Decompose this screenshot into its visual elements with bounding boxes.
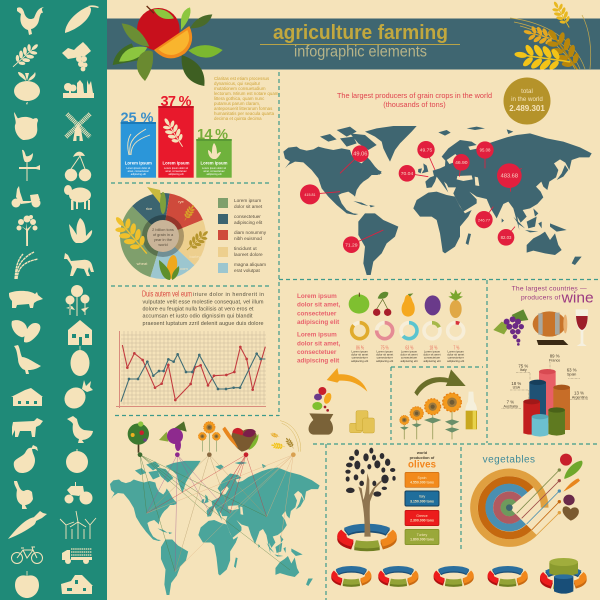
map pins: 246.77 [478, 217, 491, 222]
box: Italy: 3.150.000 tons [410, 499, 434, 503]
icon: truck [62, 549, 92, 564]
cylinder: Argentina [548, 407, 565, 436]
small captions: consectetuer [448, 356, 464, 360]
text: red lorem: dolor sit amet, [297, 302, 340, 309]
text block: gold paragraph: Claritas est etiam processus [214, 76, 270, 81]
map pins: 483.68 [501, 174, 518, 180]
text: pie centre: world [158, 242, 168, 247]
chart: donut 7 percent [448, 323, 464, 339]
cylinder labels: USA [513, 386, 521, 390]
chart: ring 4 [491, 569, 525, 584]
box: Greece: 2.300.000 tons [410, 519, 434, 523]
icon: grapes [493, 309, 528, 346]
box: Greece: Greece [416, 514, 428, 518]
icon: beet [563, 495, 575, 505]
icon: potato heart [563, 506, 579, 521]
icon: wheat on pie [108, 210, 156, 261]
map pins: 49.75 [420, 147, 432, 153]
cylinder labels [504, 354, 588, 409]
text block: gold paragraph: mutationem consuetudium [214, 86, 266, 91]
chart: donut 63 percent [401, 323, 417, 339]
text: red lorem: adipiscing elit [297, 358, 340, 365]
icon: farmhouse [61, 575, 93, 594]
text: red lorem: consectetuer [297, 310, 337, 317]
text block: duis autem: dolore eu feugiat nulla facilisis at vero eros et [142, 306, 254, 312]
legend item: diam nonummy [234, 230, 267, 235]
chart: donut 86 percent [352, 323, 368, 339]
icon: goose [14, 345, 41, 374]
icon: pig [9, 291, 43, 308]
icon: duck [67, 416, 93, 443]
icon: barrel [533, 311, 568, 345]
chart: ring 1 [334, 569, 368, 584]
icon: pineapple [60, 380, 93, 413]
map pins: 49.06 [353, 152, 367, 158]
icon: barn [11, 388, 43, 406]
series: red line [122, 345, 265, 401]
leader lines [517, 468, 561, 535]
heading: wine: The largest countries — [512, 285, 587, 292]
icon: vegetable heart [222, 427, 258, 452]
icon: carrot [563, 478, 580, 492]
cylinder labels: 7 % [507, 399, 514, 404]
box: Spain: 4.550.000 tons [410, 481, 434, 485]
legend item: erat volutpat [234, 268, 260, 273]
legend item: dolor sit amet [234, 204, 263, 209]
cylinder: France [539, 369, 556, 423]
text: red lorem [297, 293, 340, 365]
cylinder: Australia [532, 414, 548, 437]
bar: 25 percent [120, 110, 156, 178]
text: red lorem: adipiscing elit [297, 319, 340, 326]
callout: world total: total [521, 88, 533, 95]
small captions: Lorem ipsum [447, 350, 464, 354]
bar: 25 percent: 25 % [120, 110, 154, 126]
cylinder labels: 18 % [511, 381, 521, 386]
icon: pineapple [448, 289, 463, 318]
small captions: consectetuer [377, 356, 393, 360]
legend item: magna aliquam [234, 262, 266, 267]
map pins [300, 141, 522, 253]
bar: 25 percent: Lorem ipsum [125, 160, 152, 166]
icon: sheep [64, 185, 91, 210]
small captions: dolor sit amet [401, 353, 418, 357]
map pins: 46.90 [455, 160, 468, 166]
icon: top wheat ear [552, 2, 570, 28]
chart: olive ring [342, 527, 392, 548]
legend item: tincidunt ut [234, 246, 257, 251]
legend item: laoreet dolore [234, 252, 263, 257]
icon: carrot [8, 511, 47, 539]
chart: ring 2 [381, 569, 415, 584]
text block: gold paragraph: putamus parum claram, [214, 101, 260, 106]
text block: duis autem: accumsan et iusto odio dignissim qui blandit [142, 314, 253, 320]
icon: scooter [12, 186, 40, 208]
small captions: consectetuer [401, 356, 417, 360]
box: Turkey: 1.800.000 tons [410, 538, 434, 542]
pie labels [137, 199, 200, 271]
segment: rye [163, 194, 203, 236]
bar: 14 percent: Lorem ipsum [201, 160, 228, 166]
bar: 37 percent: Lorem ipsum [163, 160, 190, 166]
text block: duis autem: Duis autem vel eum [142, 290, 192, 298]
icon: wine glass [576, 309, 588, 346]
bar: 37 percent: adipiscing elit [168, 173, 184, 176]
icon: turkey [14, 112, 38, 140]
icon: header wheat [510, 2, 592, 70]
cylinder labels: France [549, 359, 560, 363]
icon: pear [402, 293, 415, 317]
percentage labels: 86 % [356, 345, 364, 351]
small captions: Lorem ipsum [401, 350, 418, 354]
text: pie centre: year in the [154, 237, 172, 242]
heading: vegetables: vegetables [483, 454, 535, 465]
text block: gold paragraph: littera gothica, quam nunc [214, 96, 265, 101]
map: grain producers [283, 126, 592, 275]
text: pie centre [147, 220, 179, 252]
heading: wine: wine [561, 291, 594, 307]
icon: oil bottle [465, 392, 477, 429]
box: Italy [405, 491, 439, 506]
text block: duis autem [142, 290, 264, 327]
icon: pear [14, 445, 38, 473]
box: Greece [405, 510, 439, 526]
small captions: dolor sit amet [376, 353, 393, 357]
text block: gold paragraph [214, 76, 279, 121]
map pins: 95.08 [480, 148, 491, 153]
icon: cow [12, 418, 43, 437]
title rule [260, 44, 460, 45]
text: pie centre: 2 billion tons [152, 227, 174, 232]
map pins: 70.04 [401, 171, 413, 177]
small captions: adipiscing elit [351, 359, 368, 363]
icon: apple and orange logo [113, 6, 223, 86]
text: pie centre: of grain in a [153, 232, 174, 237]
segment: wheat [120, 206, 163, 277]
small captions: consectetuer [352, 356, 368, 360]
segment: rice [132, 193, 170, 236]
text block: gold paragraph: dynamicus, qui sequitur [214, 81, 261, 86]
chart: stacked ring [543, 558, 583, 594]
pie labels: corn [180, 266, 188, 271]
icon: eggs [12, 320, 40, 342]
pie labels: barley [190, 254, 200, 259]
text block: gold paragraph: anteposuerit litterarum formas [214, 106, 273, 111]
small captions: dolor sit amet [424, 353, 441, 357]
box: Turkey [405, 529, 439, 545]
icon: farm scene [63, 80, 94, 98]
pie labels: wheat [137, 261, 148, 266]
heading: grain crops map [337, 91, 492, 109]
cylinder: Spain [553, 385, 570, 430]
line chart [116, 331, 266, 408]
icon: yellow wheat ear [514, 44, 570, 70]
chart: vegetables radial [474, 472, 545, 543]
icon: coins [350, 411, 374, 433]
cylinder labels: Argentina [572, 395, 588, 399]
icon: orange [66, 449, 88, 473]
bar: 25 percent: amet, consectetuer [128, 170, 149, 173]
icon: hen [14, 481, 33, 509]
percentage labels: 7 % [453, 345, 459, 351]
map pins: 71.29 [345, 242, 358, 248]
arrow: green [414, 369, 466, 396]
bar chart: percentages [120, 94, 232, 178]
icon: wheat ear [8, 39, 43, 73]
box: Spain: Spain [418, 476, 427, 480]
small captions: dolor sit amet [447, 353, 464, 357]
small captions: consectetuer [424, 356, 440, 360]
panel: olives and vegetables [334, 448, 583, 594]
icon: tractor [64, 482, 92, 504]
small captions: adipiscing elit [401, 359, 418, 363]
icon: bicycle [12, 547, 42, 564]
box: Turkey: Turkey [417, 533, 428, 537]
legend item [218, 262, 266, 273]
segment: corn [150, 236, 194, 279]
icon: sunflowers [400, 393, 461, 439]
legend: pie chart [218, 198, 267, 273]
percentage labels [356, 345, 459, 351]
small captions [351, 350, 464, 363]
icon: wheat stalks [15, 252, 38, 279]
icon: sack of produce [309, 387, 333, 435]
legend item [218, 246, 263, 257]
legend item [218, 230, 267, 241]
connector lines [140, 455, 293, 572]
text: red lorem: consectetuer [297, 349, 337, 356]
icon: barley ear [182, 226, 212, 255]
bar: 14 percent: 14 % [197, 127, 228, 143]
small captions: adipiscing elit [376, 359, 393, 363]
text block: duis autem: vulputate velit esse molestie consequat, vel illum [142, 300, 264, 306]
icon: tree [16, 215, 38, 246]
small captions: adipiscing elit [447, 359, 464, 363]
icon: turnip [14, 72, 40, 105]
text block: gold paragraph: humanitatis per seacula quarta [214, 111, 275, 116]
bar: 14 percent: adipiscing elit [206, 173, 222, 176]
icon: fruit tree [128, 421, 149, 453]
icon: cucumber [564, 461, 583, 479]
pie labels: rice [146, 206, 153, 211]
chart: donut 75 percent [377, 323, 393, 339]
map pins: 82.03 [501, 235, 512, 240]
panel: fruit statistics [297, 285, 594, 439]
icon: corn [69, 218, 92, 243]
cylinder labels: 13 % [574, 390, 584, 395]
panel: icon sidebar [0, 0, 107, 600]
heading: olives: world [416, 451, 428, 455]
bar: 37 percent: amet, consectetuer [165, 170, 187, 173]
icon: cherries [373, 292, 391, 316]
pie labels: rye [178, 199, 185, 204]
icon: windmill [66, 114, 90, 141]
text block: gold paragraph: lectorum. Mirum est notare quam [214, 91, 279, 96]
icon: apple [15, 571, 39, 598]
bar: 25 percent: adipiscing elit [131, 173, 146, 176]
arrow: yellow [327, 368, 367, 392]
text block: duis autem: praesent luptatum zzril delenit augue duis dolore [142, 321, 264, 327]
world map shape [110, 461, 320, 595]
heading: grain crops map: (thousands of tons) [383, 100, 446, 109]
series: teal line [121, 352, 265, 402]
heading: wine: producers of [521, 294, 560, 301]
legend item [218, 214, 263, 225]
callout: world total: 2.489.301 [509, 104, 545, 113]
legend item: adipiscing elit [234, 220, 263, 225]
small captions: Lorem ipsum [351, 350, 368, 354]
cylinder labels: 63 % [567, 368, 577, 373]
icon: plum [425, 295, 441, 315]
heading: wine [512, 285, 594, 307]
icon: cucumber [65, 5, 99, 33]
cylinder labels: Australia [504, 405, 519, 409]
icon: rice stalk [147, 187, 166, 214]
percentage labels: 75 % [381, 345, 389, 351]
icon: rooster [17, 7, 44, 35]
small captions: Lorem ipsum [376, 350, 393, 354]
heading: grain crops map: The largest producers of grain crops in the world [337, 91, 492, 100]
legend item: Lorem ipsum [234, 198, 261, 203]
callout: world total [504, 78, 550, 124]
icon: rye ear [181, 203, 197, 222]
icon: grapes [159, 421, 187, 451]
cylinder: USA [523, 399, 540, 435]
icon: wind turbines [60, 511, 96, 539]
legend item [218, 198, 263, 209]
small captions: dolor sit amet [351, 353, 368, 357]
icon: brown wheat ear [547, 30, 579, 70]
callout: world total: in the world [511, 96, 543, 103]
text: red lorem: Lorem ipsum [297, 293, 337, 300]
icon: corn cob [159, 254, 179, 280]
cylinder labels: 75 % [518, 363, 528, 368]
world map shape [283, 126, 592, 275]
text block: gold paragraph: decima et quinta decima [214, 116, 262, 121]
map pins: 415.81 [304, 193, 316, 197]
chart: wine cylinders [502, 354, 588, 437]
small captions: Lorem ipsum [424, 350, 441, 354]
subtitle: infographic elements [294, 44, 427, 60]
icon: cherries [65, 152, 91, 181]
cylinder labels: 89 % [550, 354, 560, 359]
icon: weather vane [19, 150, 40, 181]
bar: 37 percent: Lorem ipsum dolor sit [164, 167, 188, 170]
small captions: adipiscing elit [424, 359, 441, 363]
icon: wheat bundle [270, 421, 301, 452]
text: red lorem: dolor sit amet, [297, 340, 340, 347]
bar: 14 percent: amet, consectetuer [203, 170, 225, 173]
icon: middle wheat ear [524, 26, 559, 44]
icon: olive tree [345, 448, 396, 537]
chart: ring 3 [437, 569, 471, 584]
connector dots [138, 452, 296, 457]
icon: grapes and leaves [62, 42, 91, 71]
text: red lorem: Lorem ipsum [297, 332, 337, 339]
bar: 37 percent [158, 94, 194, 178]
bar: 14 percent [196, 127, 232, 178]
box: Italy: Italy [419, 495, 425, 499]
icon: plum [70, 346, 90, 376]
text block: duis autem: iriure dolor in hendrerit in [193, 292, 264, 298]
icon: horse [64, 253, 94, 276]
icon: house [68, 320, 92, 345]
icon: sunflowers [198, 422, 220, 452]
bar: 37 percent: 37 % [160, 94, 192, 110]
chart: donut 18 percent [424, 323, 440, 339]
bar: 14 percent: Lorem ipsum dolor sit [202, 167, 226, 170]
segment: barley [163, 220, 206, 265]
header band [107, 18, 600, 70]
percentage labels: 18 % [429, 345, 437, 351]
title: agriculture farming [273, 22, 448, 44]
icon: wheat stalk arcs [510, 15, 591, 69]
cylinder: Italy [529, 380, 546, 427]
heading: olives: production of [410, 456, 435, 460]
icon: sunflowers [66, 285, 90, 316]
percentage labels: 63 % [405, 345, 413, 351]
heading: olives [408, 451, 436, 471]
icon: green apple [349, 293, 369, 314]
panel: origin map [110, 421, 320, 595]
pie chart: grain types [108, 187, 212, 280]
icon: tomato [560, 454, 572, 466]
cylinder labels: Spain [567, 373, 576, 377]
box: Spain [405, 472, 439, 487]
cylinder labels: Italy [520, 368, 527, 372]
legend item: consectetuer [234, 214, 261, 219]
legend item: nibh euismod [234, 236, 262, 241]
bar: 25 percent: Lorem ipsum dolor sit [126, 167, 151, 170]
heading: olives: olives [408, 460, 436, 471]
